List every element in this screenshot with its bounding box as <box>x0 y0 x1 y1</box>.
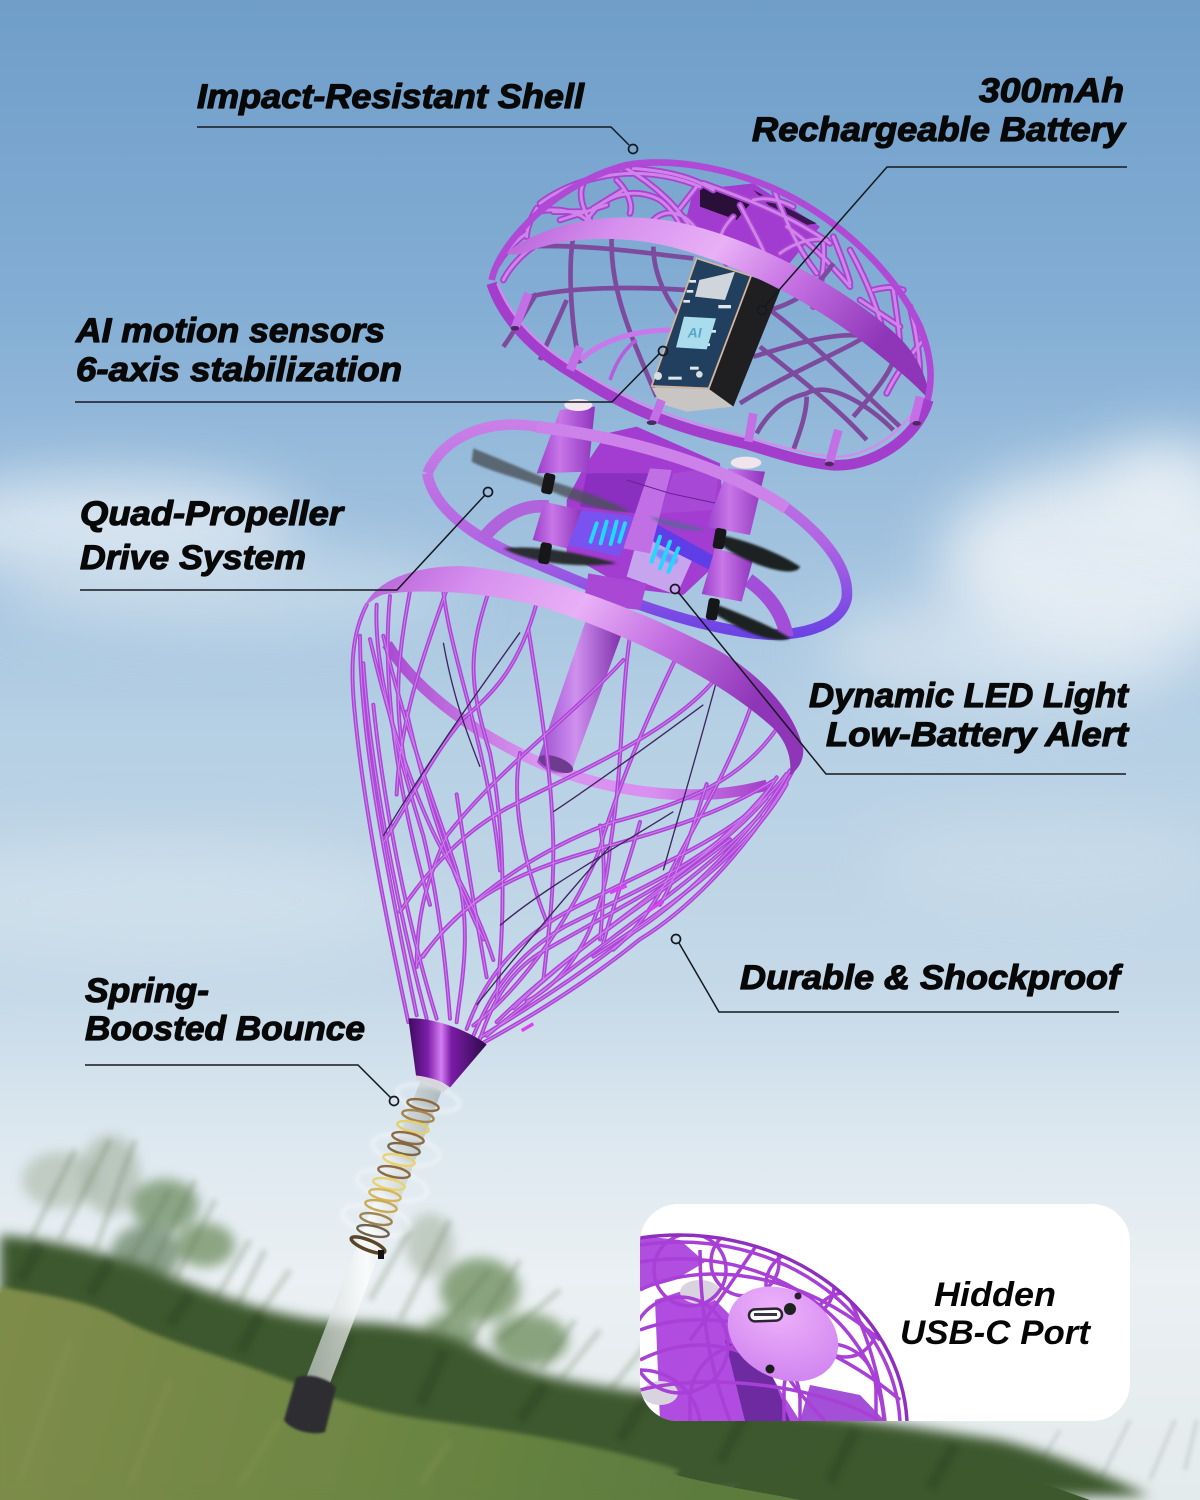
cone struts <box>352 589 797 1043</box>
cone cage <box>352 566 803 1093</box>
callout card: Hidden USB-C Port <box>632 1204 1130 1421</box>
dome shell <box>492 163 931 466</box>
rim struts <box>515 293 920 463</box>
glass tube and rubber foot <box>284 1082 442 1433</box>
label: Quad-Propeller Drive System: Drive System <box>80 539 306 577</box>
label: Spring-Boosted Bounce <box>85 972 398 1106</box>
label: 300mAh Rechargeable Battery: Rechargeable Battery <box>752 111 1127 149</box>
magenta highlights <box>522 886 663 1031</box>
label: 300mAh Rechargeable Battery: 300mAh <box>979 72 1124 110</box>
mid ring, back part <box>427 425 847 634</box>
icon: orb close-up with USB-C port <box>632 1228 907 1421</box>
label: 300mAh Rechargeable Battery <box>752 72 1127 314</box>
USB-C socket <box>749 1308 782 1322</box>
label: Dynamic LED Light: Low-Battery Alert <box>826 716 1130 754</box>
callout card: Hidden USB-C Port: Hidden <box>934 1276 1056 1314</box>
drone body <box>567 427 723 595</box>
dome band and rim <box>505 217 931 402</box>
drone core: ring, body, motors and propellers <box>427 399 847 640</box>
motor shafts <box>538 472 727 621</box>
label: Dynamic LED Light: Dynamic LED Light <box>809 677 1130 715</box>
blurred tree line and grass <box>0 1135 1197 1500</box>
motors <box>537 407 595 473</box>
LED light strips <box>591 522 678 572</box>
callout card: Hidden USB-C Port: USB-C Port <box>900 1314 1092 1352</box>
label: Quad-Propeller Drive System <box>80 488 492 590</box>
battery and circuit board module <box>652 258 782 412</box>
label: Quad-Propeller Drive System: Quad-Propeller <box>80 495 345 533</box>
label: Durable & Shockproof <box>672 934 1124 1012</box>
cone back band <box>387 644 767 795</box>
thin dark struts <box>383 632 717 1005</box>
label: Impact-Resistant Shell <box>197 78 638 154</box>
label: AI motion sensors: AI motion sensors <box>75 312 385 350</box>
label: AI motion sensors: 6-axis stabilization <box>76 351 402 389</box>
label: Durable & Shockproof: Durable & Shockproof <box>740 959 1124 997</box>
inner purple cone <box>683 183 820 267</box>
ring front part <box>537 427 787 508</box>
label: AI motion sensors <box>75 312 667 402</box>
grass field <box>0 1293 800 1500</box>
spring with glow <box>340 1080 462 1259</box>
cone front band <box>363 566 803 776</box>
cone tip <box>408 1018 487 1088</box>
upper cage struts <box>498 167 923 393</box>
pink port plate <box>728 1286 838 1382</box>
lower cage grid <box>503 237 900 450</box>
propellers <box>472 448 800 640</box>
label: Impact-Resistant Shell: Impact-Resistant Shell <box>197 78 586 116</box>
hedge row <box>0 1235 1150 1496</box>
label: Spring-Boosted Bounce: Spring- <box>85 972 209 1010</box>
central stem <box>537 617 624 777</box>
label: Spring-Boosted Bounce: Boosted Bounce <box>85 1010 365 1048</box>
AI chip label: AI <box>687 324 703 340</box>
label: Dynamic LED Light <box>670 584 1130 774</box>
